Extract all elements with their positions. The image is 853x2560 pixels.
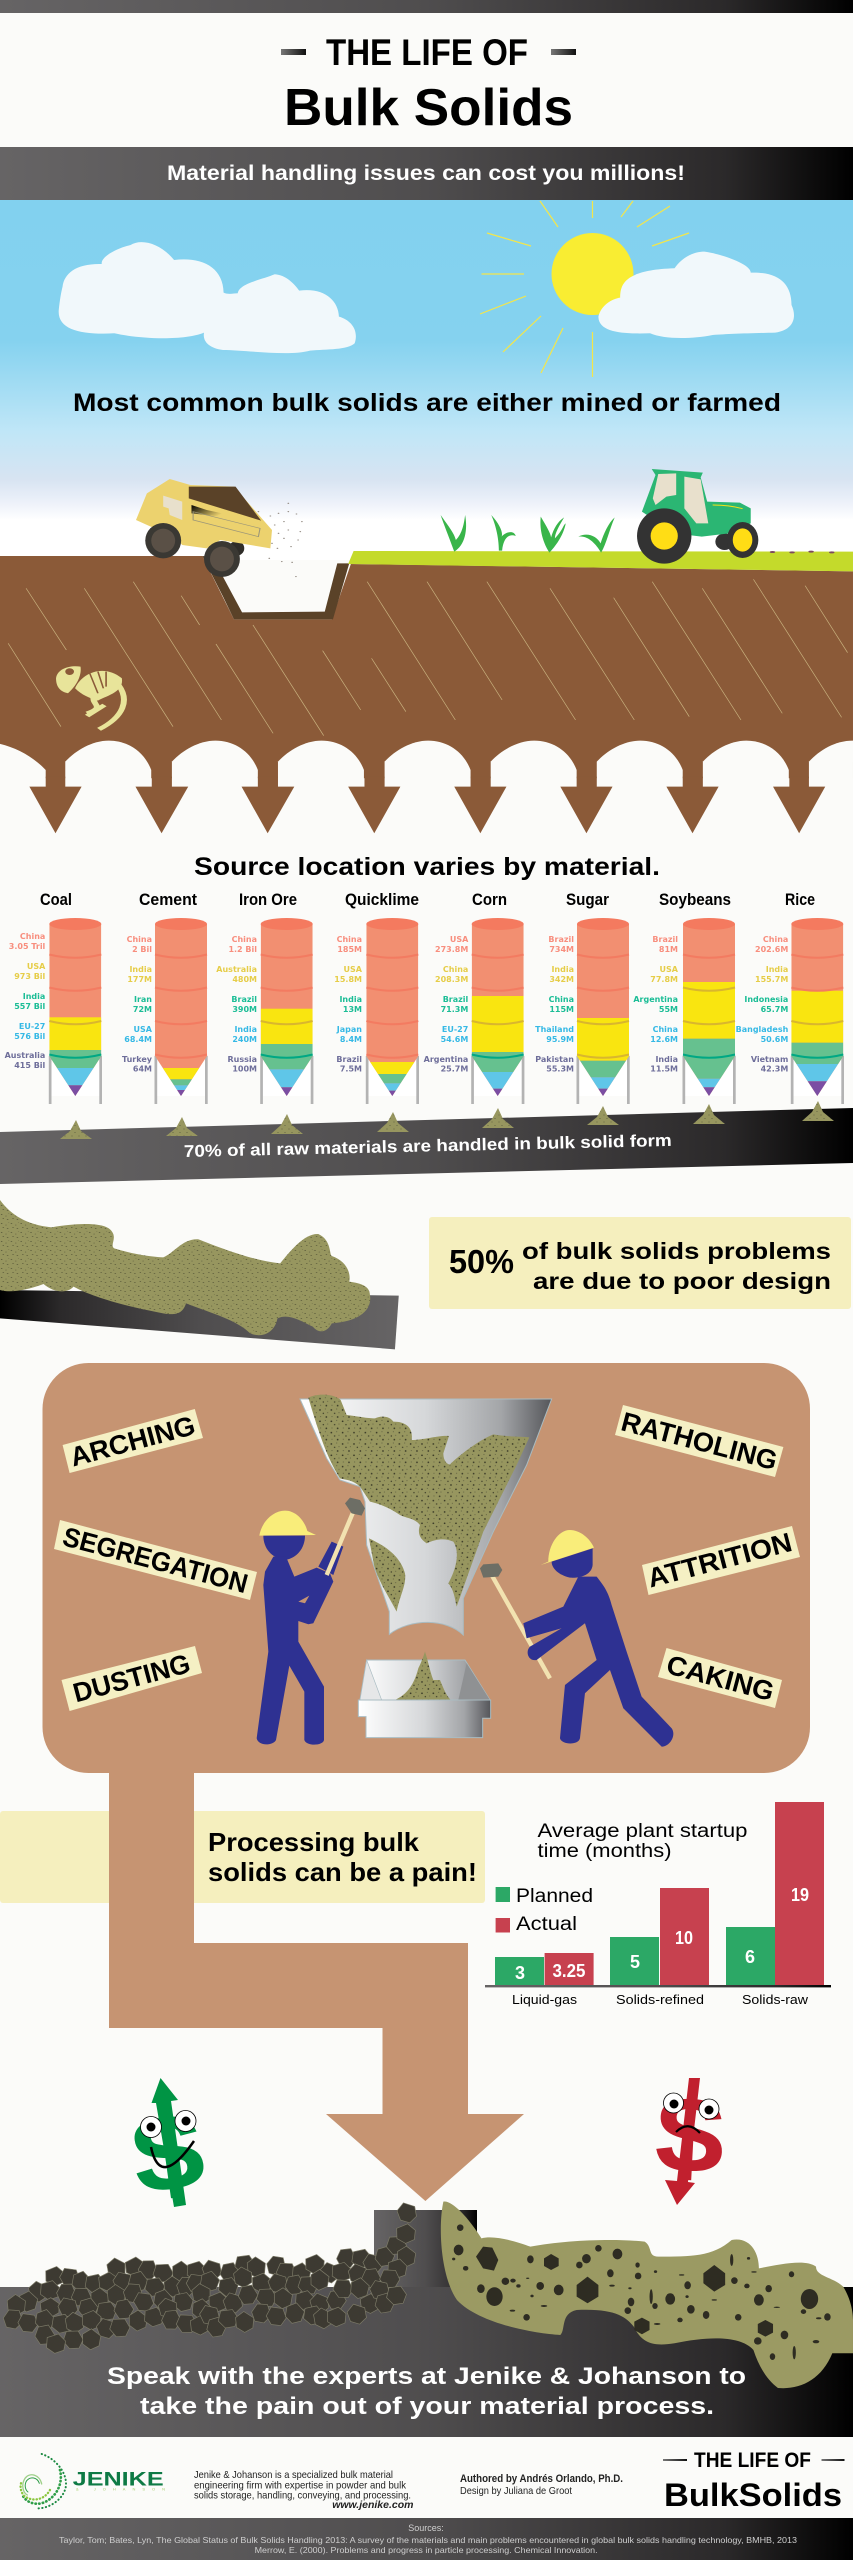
title: THE LIFE OF [326, 32, 528, 73]
silo: cement: Turkey [122, 1055, 153, 1064]
footer title: THE LIFE OF [694, 2449, 811, 2472]
callout: pain: solids can be a pain! [208, 1857, 477, 1887]
silo: corn: 25.7M [441, 1064, 468, 1074]
silo: quicklime: 185M [337, 945, 362, 954]
silo: sugar: 115M [549, 1005, 574, 1014]
silo: iron ore: Brazil [231, 995, 257, 1004]
silo: sugar: Thailand [535, 1025, 574, 1034]
silo: cement: 2 Bil [132, 945, 152, 954]
silo: quicklime: 13M [343, 1005, 362, 1014]
values [515, 1885, 809, 1983]
values: 3 [515, 1963, 525, 1983]
sign: dusting: DUSTING [70, 1648, 194, 1708]
silo: soybeans: 81M [659, 945, 678, 954]
footer title [663, 2449, 844, 2513]
silo: quicklime: 15.8M [334, 975, 362, 984]
silo: cement: 177M [127, 975, 152, 984]
silo: iron ore: Russia [227, 1055, 257, 1064]
silo: rice: Rice [785, 891, 815, 909]
sky [0, 200, 853, 520]
silo: quicklime: China [337, 935, 362, 944]
silo: soybeans: 55M [659, 1005, 678, 1014]
values: 3.25 [552, 1961, 586, 1981]
silo: quicklime: India [339, 995, 362, 1004]
silo: sugar: India [551, 965, 574, 974]
silo: rice: Indonesia [744, 995, 788, 1004]
logo: Jenike and Johanson [21, 2454, 165, 2508]
sources: Sources: [408, 2523, 444, 2533]
subtitle banner: Material handling issues can cost you millions! [167, 162, 685, 185]
values: 5 [630, 1952, 640, 1972]
silo: quicklime [334, 891, 419, 1104]
values: 19 [791, 1885, 809, 1905]
axis labels [512, 1992, 809, 2007]
company description: Jenike & Johanson is a specialized bulk material [194, 2469, 393, 2481]
silo: coal: China [20, 932, 45, 941]
silo: cement: 72M [133, 1005, 152, 1014]
chart title [538, 1821, 748, 1862]
sign: segregation: SEGREGATION [60, 1522, 251, 1599]
silo: rice: India [766, 965, 788, 974]
silo: iron ore: Australia [216, 965, 257, 974]
bin under hopper [358, 1652, 491, 1738]
ground scene [0, 551, 853, 790]
author credits: Design by Juliana de Groot [460, 2485, 572, 2497]
icon: sad dollar: $ [652, 2073, 728, 2197]
silo: rice: Vietnam [751, 1055, 788, 1064]
callout: 50 percent: are due to poor design [533, 1268, 831, 1294]
silo: cement: Cement [139, 891, 197, 909]
silo: sugar: 342M [549, 975, 574, 984]
callout: 50 percent: of bulk solids problems [522, 1238, 831, 1264]
sources [0, 2518, 853, 2560]
heading: source location: Source location varies by material. [194, 853, 660, 881]
icon: dump truck [136, 479, 303, 577]
footer panel [0, 2437, 853, 2518]
silo: corn: Brazil [443, 995, 469, 1004]
footer title: BulkSolids [664, 2477, 842, 2513]
silo: quicklime: 8.4M [340, 1035, 362, 1044]
values: 10 [675, 1928, 693, 1948]
company description: solids storage, handling, conveying, and processing. [194, 2489, 411, 2501]
silo: soybeans: 12.6M [650, 1035, 678, 1044]
top bar [0, 0, 853, 13]
silo: corn: 71.3M [441, 1005, 468, 1014]
silo: soybeans: Argentina [633, 995, 678, 1004]
panel: problems [42, 1363, 810, 1773]
company description [194, 2469, 414, 2511]
silo: iron ore: 480M [232, 975, 257, 984]
silo: corn: EU-27 [442, 1025, 468, 1034]
silo: quicklime: Brazil [336, 1055, 362, 1064]
logo: Jenike and Johanson: & JOHANSON [76, 2486, 165, 2492]
logo: Jenike and Johanson: JENIKE [73, 2469, 164, 2491]
silo: rice: 65.7M [761, 1005, 788, 1014]
silo: quicklime: 7.5M [340, 1064, 362, 1074]
silo: quicklime: Japan [336, 1025, 362, 1034]
silo: iron ore: India [234, 1025, 257, 1034]
silo: iron ore: 240M [232, 1035, 257, 1044]
silo: rice: 202.6M [755, 945, 788, 954]
icon: fossil [56, 666, 124, 729]
heading: mined or farmed: Most common bulk solids are either mined or farmed [73, 389, 781, 417]
silo: coal: Coal [40, 891, 72, 909]
silo: soybeans [633, 891, 736, 1104]
icon: happy dollar: $ [124, 2089, 211, 2218]
yellow band behind pipe [0, 1811, 485, 1903]
silo: iron ore: China [232, 935, 257, 944]
arrows down from ground [29, 777, 825, 833]
silo: soybeans: USA [660, 965, 679, 974]
silo: sugar [535, 891, 630, 1104]
call to action: take the pain out of your material process. [140, 2393, 714, 2420]
silo: cement: Iran [134, 995, 152, 1004]
values: 6 [745, 1947, 755, 1967]
silo: sugar: 55.3M [546, 1064, 574, 1074]
sign: ratholing: RATHOLING [618, 1406, 780, 1476]
company description: www.jenike.com [332, 2499, 414, 2511]
silo: rice: 155.7M [755, 975, 788, 984]
silo: coal: 576 Bil [14, 1032, 46, 1041]
clouds [59, 242, 794, 353]
silo: corn: 273.8M [435, 945, 468, 954]
chart title: Average plant startup [538, 1821, 748, 1842]
call to action [107, 2363, 746, 2420]
silo: corn [424, 891, 524, 1104]
bar chart: plant startup time [485, 1802, 831, 2007]
icon: plants [441, 515, 615, 553]
silo: coal: India [23, 992, 45, 1001]
icon: tractor [637, 469, 834, 564]
silo: iron ore: 390M [232, 1005, 257, 1014]
callout: 50 percent: 50% [449, 1243, 514, 1280]
silo: corn: Corn [472, 891, 507, 909]
silo: coal: EU-27 [19, 1022, 45, 1031]
silo: coal: USA [27, 962, 46, 971]
silo: soybeans: 77.8M [650, 975, 678, 984]
material piles on conveyor [60, 1101, 834, 1139]
silo: rice: 50.6M [761, 1035, 788, 1044]
axis labels: Solids-raw [742, 1992, 809, 2007]
silo: quicklime: USA [344, 965, 363, 974]
silo: sugar: 95.9M [546, 1035, 574, 1044]
bars [485, 1802, 831, 1987]
silo: corn: China [443, 965, 468, 974]
pile: free flowing granules [1, 2199, 421, 2355]
call to action: Speak with the experts at Jenike & Johanson to [107, 2363, 746, 2390]
silo: rice: Bangladesh [736, 1025, 789, 1034]
silo: corn: USA [450, 935, 469, 944]
silo: cement: 64M [133, 1064, 152, 1074]
silo: corn: Argentina [424, 1055, 468, 1064]
silo: coal: 557 Bil [14, 1002, 46, 1011]
silo: quicklime: Quicklime [345, 891, 419, 909]
silo: sugar: China [549, 995, 574, 1004]
sign: arching: ARCHING [67, 1410, 198, 1472]
silo: soybeans: India [655, 1055, 678, 1064]
sources: Merrow, E. (2000). Problems and progress in particle processing. Chemical Innovation. [255, 2545, 598, 2555]
silo: coal: 415 Bil [14, 1061, 46, 1070]
callout: pain: Processing bulk [208, 1827, 420, 1857]
silo: soybeans: 11.5M [650, 1064, 678, 1074]
callout: 50 percent [429, 1217, 851, 1309]
sign: attrition: ATTRITION [644, 1527, 795, 1593]
conveyor band [0, 1108, 853, 1184]
axis labels: Solids-refined [616, 1992, 704, 2007]
silo: coal: 973 Bil [14, 972, 46, 981]
bottom band and tower [0, 2210, 853, 2437]
silo: cement: China [127, 935, 152, 944]
silo: soybeans: Soybeans [659, 891, 731, 909]
silo: rice: 42.3M [761, 1064, 788, 1074]
silo: cement: USA [134, 1025, 153, 1034]
silo: soybeans: Brazil [652, 935, 678, 944]
silo: iron ore: 1.2 Bil [228, 945, 257, 954]
silo: iron ore: Iron Ore [239, 891, 297, 909]
silo: sugar: Brazil [548, 935, 574, 944]
silo: sugar: Pakistan [535, 1055, 574, 1064]
silo: corn: 208.3M [435, 975, 468, 984]
legend [496, 1886, 593, 1935]
silo: sugar: Sugar [566, 891, 610, 909]
chart title: time (months) [538, 1841, 672, 1862]
silo: soybeans: China [653, 1025, 678, 1034]
subtitle banner [0, 147, 853, 200]
title [281, 32, 576, 137]
silo: cement: 68.4M [124, 1035, 152, 1044]
hopper [300, 1395, 552, 1635]
author credits [460, 2473, 623, 2497]
silo: cement [122, 891, 208, 1104]
silo: coal: Australia [5, 1051, 45, 1060]
conveyor caption: 70% of all raw materials are handled in bulk solid form [184, 1131, 672, 1161]
flow pipe and arrow [109, 1760, 524, 2201]
silo: coal: 3.05 Tril [9, 942, 46, 951]
silo: coal [5, 891, 102, 1104]
legend: Actual [516, 1914, 577, 1935]
author credits: Authored by Andrés Orlando, Ph.D. [460, 2473, 623, 2485]
title: Bulk Solids [284, 79, 573, 137]
silo: rice: China [763, 935, 788, 944]
callout: pain [208, 1827, 477, 1887]
silo: iron ore: 100M [232, 1064, 257, 1074]
worker left [257, 1498, 365, 1745]
sign: caking: CAKING [663, 1650, 777, 1707]
sources: Taylor, Tom; Bates, Lyn, The Global Status of Bulk Solids Handling 2013: A survey of the materials and main problems encountered in global bulk solids handling technology, BMHB, 2013 [59, 2535, 797, 2545]
silo: sugar: 734M [549, 945, 574, 954]
silo: cement: India [129, 965, 152, 974]
sun [480, 201, 689, 377]
silo: corn: 54.6M [441, 1035, 468, 1044]
axis labels: Liquid-gas [512, 1992, 578, 2007]
worker right [480, 1530, 673, 1747]
silo: iron ore [216, 891, 313, 1104]
silo: rice [736, 891, 844, 1104]
legend: Planned [516, 1886, 593, 1907]
pile on belt [0, 1200, 399, 1349]
company description: engineering firm with expertise in powder and bulk [194, 2479, 407, 2491]
pile: caked material [441, 2202, 853, 2388]
